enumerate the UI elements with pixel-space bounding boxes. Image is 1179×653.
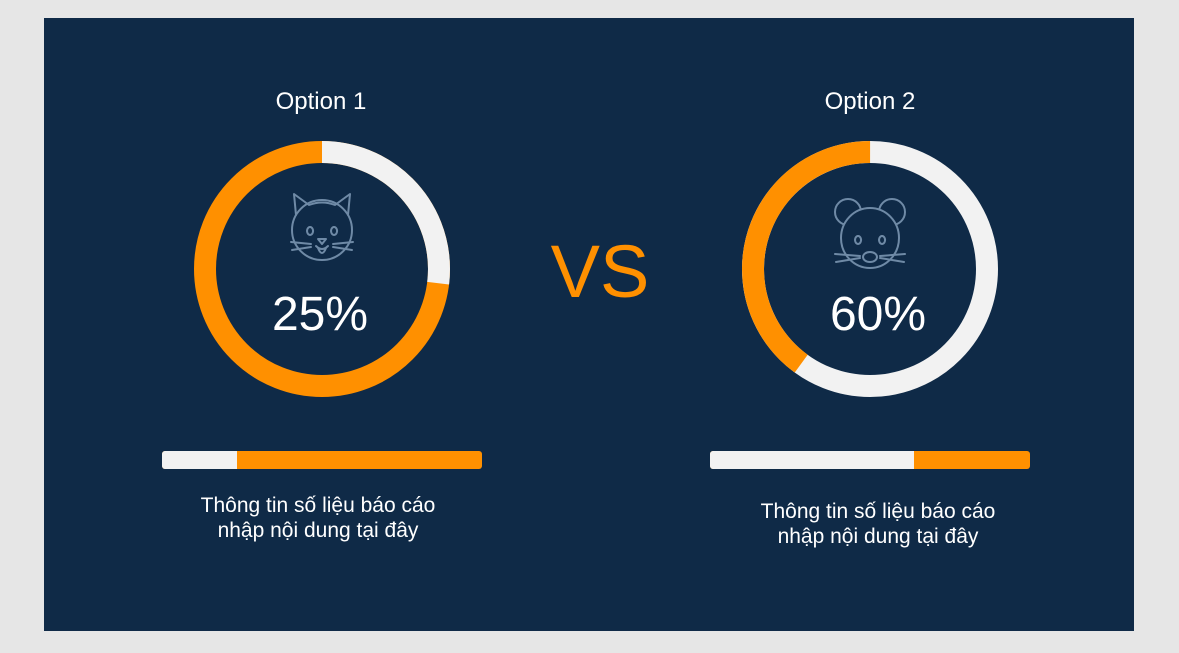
- percent 1: 25%: [272, 288, 368, 341]
- caption 2: [761, 500, 995, 548]
- icon: mouse: [835, 199, 905, 268]
- caption 1: nhập nội dung tại đây: [218, 519, 418, 542]
- VS label: VS: [551, 230, 649, 313]
- caption 1: Thông tin số liệu báo cáo: [201, 494, 435, 517]
- heading: option 1: Option 1: [276, 88, 366, 115]
- donut 2: [707, 106, 1033, 432]
- progress bar 1: [162, 451, 482, 469]
- caption 1: [201, 494, 435, 542]
- caption 2: Thông tin số liệu báo cáo: [761, 500, 995, 523]
- progress bar 2: [710, 451, 1030, 469]
- icon: cat: [291, 194, 353, 260]
- caption 2: nhập nội dung tại đây: [778, 525, 978, 548]
- percent 2: 60%: [830, 288, 926, 341]
- donut 1: [205, 152, 439, 386]
- heading: option 2: Option 2: [825, 88, 915, 115]
